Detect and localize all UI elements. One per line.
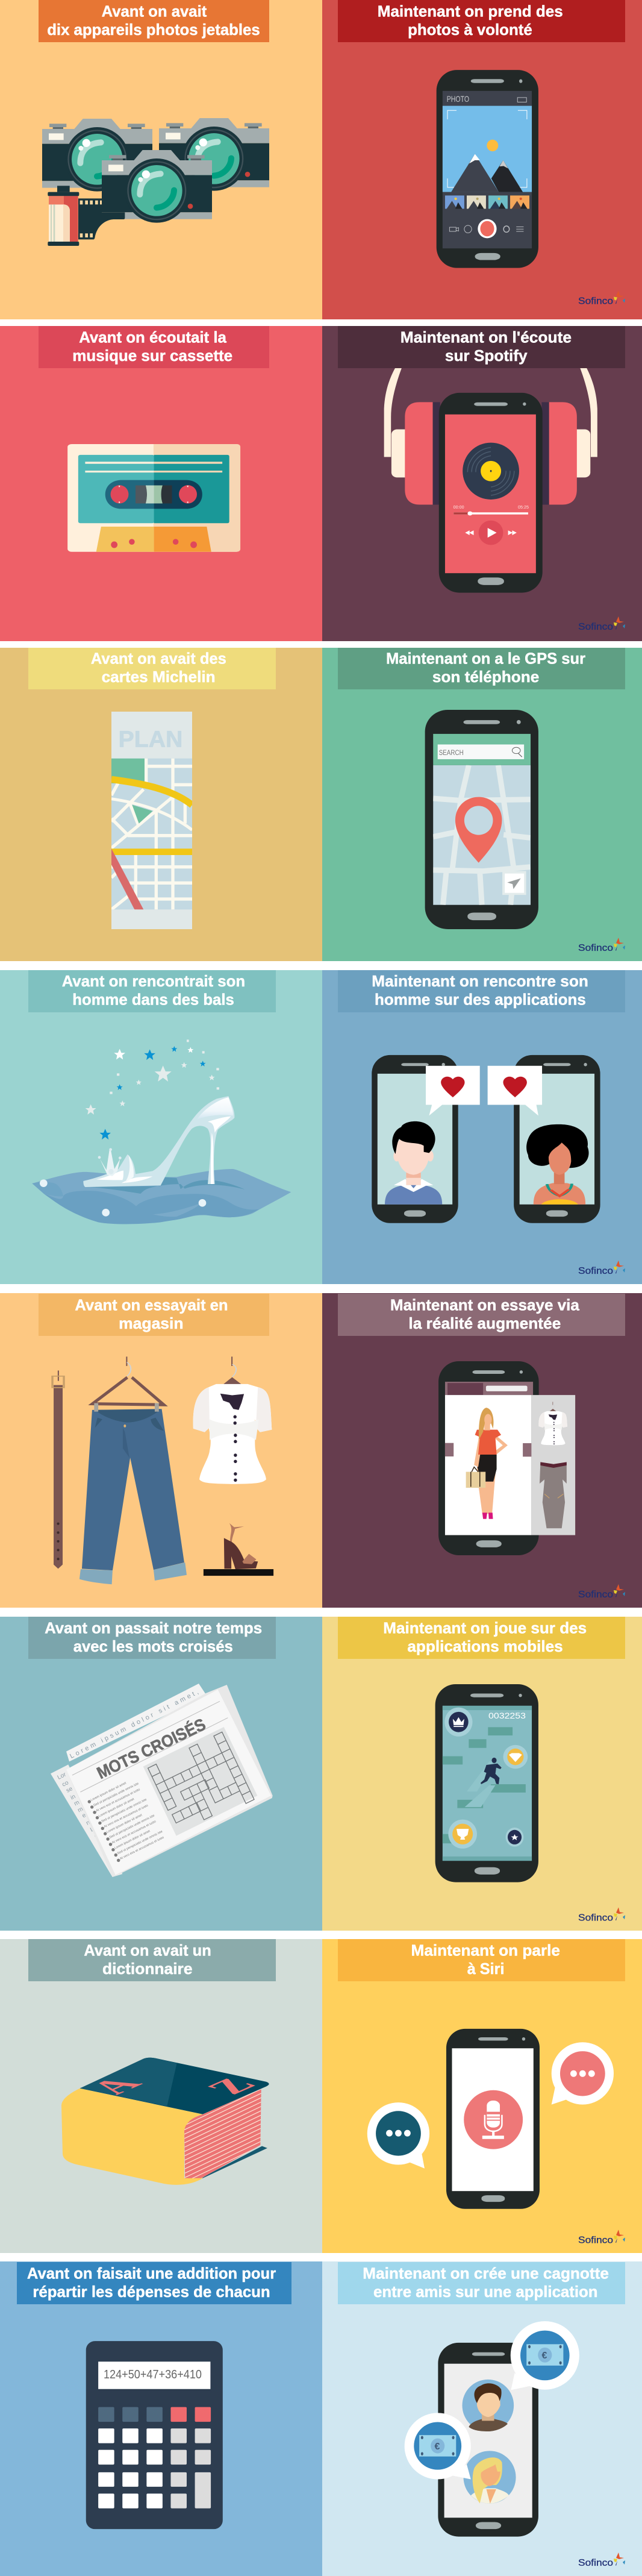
panel: GPS xyxy=(322,648,642,961)
speech bubble: euro left: € xyxy=(435,2442,440,2452)
logo: Sofinco xyxy=(578,1261,625,1276)
heading: Siri: à Siri xyxy=(467,1960,505,1978)
phone: camera app: PHOTO xyxy=(447,94,469,104)
logo: Sofinco xyxy=(578,1907,625,1923)
icon: newspaper: At vero eos et accusamus et iusto xyxy=(96,1788,141,1813)
phone: music player xyxy=(439,393,543,593)
phone: camera app xyxy=(437,70,538,268)
icon: glass slipper on cushion xyxy=(32,1039,291,1224)
logo: Sofinco: Sofinco xyxy=(578,2558,613,2568)
icon: newspaper: Sed ut perspiciatis unde omnis iste xyxy=(109,1814,155,1840)
heading: Spotify xyxy=(338,326,625,368)
speech bubble: blue xyxy=(367,2102,429,2169)
heading: GPS xyxy=(338,648,625,689)
icon: cameras and film roll xyxy=(42,118,269,246)
panel: money pot xyxy=(322,2261,642,2576)
logo: Sofinco: Sofinco xyxy=(578,1913,613,1923)
heading: ball xyxy=(28,970,276,1012)
panel: augmented reality xyxy=(322,1293,642,1608)
logo: Sofinco: Sofinco xyxy=(578,943,613,953)
row 6: crosswords vs. mobile games xyxy=(0,1617,642,1931)
logo: Sofinco xyxy=(578,290,625,306)
icon: two phones with hearts xyxy=(372,1055,600,1223)
row 2: cassette vs. Spotify xyxy=(0,326,642,641)
heading: shop xyxy=(39,1294,269,1336)
panel: calculator xyxy=(0,2261,322,2576)
cushion xyxy=(32,1169,291,1224)
heading: crosswords: avec les mots croisés xyxy=(73,1637,233,1655)
heading: phone photos: photos à volonté xyxy=(408,20,532,39)
logo: Sofinco: Sofinco xyxy=(578,1590,613,1600)
panel: mobile games xyxy=(322,1617,642,1931)
stars xyxy=(86,1039,219,1139)
logo: Sofinco xyxy=(578,616,625,632)
icon: newspaper: Lorem ipsum dolor sit amet xyxy=(114,1829,151,1850)
heading: Spotify: sur Spotify xyxy=(445,346,528,365)
icon: calculator xyxy=(86,2341,223,2529)
heading: augmented reality: Maintenant on essaye via xyxy=(390,1296,579,1314)
heading: cassette xyxy=(39,326,269,368)
icon: newspaper: Lorem ipsum dolor sit amet xyxy=(90,1781,127,1802)
speech bubble: pink xyxy=(552,2042,614,2105)
panel: Spotify xyxy=(322,326,642,641)
heading: crosswords xyxy=(28,1617,276,1659)
avatar: man xyxy=(462,2380,514,2431)
heading: dating apps xyxy=(338,970,625,1012)
panel: glass slipper xyxy=(0,970,322,1284)
heading: dating apps: homme sur des applications xyxy=(375,991,586,1009)
heading: calculator: Avant on faisait une addition pour xyxy=(27,2264,276,2283)
shirt xyxy=(193,1356,272,1484)
heading: Spotify: Maintenant on l'écoute xyxy=(400,328,572,346)
speech bubble: right heart xyxy=(488,1066,542,1115)
icon: newspaper: m xyxy=(73,1799,81,1807)
heading: augmented reality xyxy=(338,1294,625,1336)
heading: ball: Avant on rencontrait son xyxy=(62,972,245,990)
row 8: calculator vs. money pot xyxy=(0,2261,642,2576)
phone: game: 0032253 xyxy=(488,1711,526,1720)
row 7: dictionary vs. Siri xyxy=(0,1939,642,2253)
icon: newspaper: in xyxy=(69,1793,76,1801)
icon: newspaper: Lorem ipsum dolor sit amet xyxy=(98,1797,135,1818)
speech bubble: euro right: € xyxy=(542,2351,547,2361)
crown xyxy=(98,1148,122,1176)
heading: road map xyxy=(28,648,276,689)
shadow under shoe xyxy=(83,1177,245,1194)
icon: folded map: PLAN xyxy=(119,727,182,752)
panel: Siri xyxy=(322,1939,642,2253)
icon: newspaper: Sed ut perspiciatis unde omnis iste xyxy=(117,1830,163,1855)
icon: newspaper: Lorem ipsum dolor sit amet, xyxy=(69,1688,200,1760)
heading: calculator xyxy=(17,2262,291,2304)
heading: shop: magasin xyxy=(119,1314,184,1332)
icon: A-Z book: A xyxy=(79,2074,153,2098)
icon: newspaper: At vero eos et accusamus et iusto xyxy=(111,1820,157,1845)
heading: money pot: Maintenant on crée une cagnotte xyxy=(363,2264,609,2283)
icon: newspaper: MOTS CROISÉS xyxy=(94,1715,208,1782)
icon: newspaper: Lorem ipsum dolor sit amet xyxy=(106,1813,143,1834)
panel: road map xyxy=(0,648,322,961)
heading: dictionary: dictionnaire xyxy=(102,1960,193,1978)
heading: disposable cameras xyxy=(39,0,269,42)
panel: cassette xyxy=(0,326,322,641)
heading: phone photos: Maintenant on prend des xyxy=(378,2,563,20)
icon: cassette tape xyxy=(67,444,240,552)
logo: Sofinco: Sofinco xyxy=(578,296,613,306)
logo: Sofinco xyxy=(578,2230,625,2245)
heading: dictionary: Avant on avait un xyxy=(84,1941,211,1960)
icon: headphones xyxy=(384,368,597,505)
icon: newspaper: e xyxy=(81,1812,87,1819)
heading: calculator: répartir les dépenses de chacun xyxy=(33,2283,270,2301)
phone: money pot app xyxy=(438,2343,538,2537)
phone: voice assistant xyxy=(446,2029,540,2209)
heading: dating apps: Maintenant on rencontre son xyxy=(372,972,588,990)
heading: cassette: musique sur cassette xyxy=(72,346,232,365)
panel: phone photos xyxy=(322,0,642,319)
heading: GPS: Maintenant on a le GPS sur xyxy=(386,650,585,668)
panel: crosswords xyxy=(0,1617,322,1931)
icon: belt, jeans, shirt, shoe xyxy=(52,1356,273,1584)
icon: newspaper: At vero eos et accusamus et iusto xyxy=(104,1804,149,1829)
heading: shop: Avant on essayait en xyxy=(75,1296,228,1314)
woman figure xyxy=(466,1408,508,1519)
icon: newspaper: Lor xyxy=(57,1771,67,1781)
row 5: shop vs. augmented reality xyxy=(0,1293,642,1608)
icon: newspaper: c xyxy=(93,1832,99,1840)
icon: folded map xyxy=(111,712,192,929)
phone: virtual fitting xyxy=(438,1361,575,1555)
phone: music player: 00:00 xyxy=(453,506,464,510)
row 1: disposable cameras vs. phone photos xyxy=(0,0,642,319)
heading: crosswords: Avant on passait notre temps xyxy=(45,1619,262,1637)
slipper xyxy=(83,1096,234,1187)
panel: dating apps xyxy=(322,970,642,1284)
heading: disposable cameras: Avant on avait xyxy=(102,2,207,20)
heading: augmented reality: la réalité augmentée xyxy=(408,1314,561,1332)
logo: Sofinco xyxy=(578,2552,625,2568)
heading: Siri: Maintenant on parle xyxy=(411,1941,560,1960)
heading: mobile games: Maintenant on joue sur des xyxy=(383,1619,587,1637)
shoe on stand xyxy=(204,1523,273,1576)
avatar: woman xyxy=(464,2451,516,2504)
heading: GPS: son téléphone xyxy=(432,668,539,686)
heading: money pot xyxy=(338,2262,625,2304)
icon: newspaper: co xyxy=(61,1779,70,1788)
icon: calculator: 124+50+47+36+410 xyxy=(104,2368,202,2381)
heading: disposable cameras: dix appareils photos jetables xyxy=(47,20,260,39)
row 3: road map vs. GPS xyxy=(0,648,642,961)
belt xyxy=(52,1370,64,1568)
panel: shop clothes xyxy=(0,1293,322,1608)
logo: Sofinco: Sofinco xyxy=(578,622,613,632)
panel: disposable cameras xyxy=(0,0,322,319)
row 4: ball vs. dating apps xyxy=(0,970,642,1284)
cushion folds xyxy=(44,1191,259,1224)
logo: Sofinco xyxy=(578,938,625,953)
heading: dictionary xyxy=(28,1939,276,1981)
icon: newspaper: Sed ut perspiciatis unde omnis iste xyxy=(93,1782,139,1808)
phone: music player: 05:25 xyxy=(518,506,529,510)
icon: newspaper: L xyxy=(89,1826,95,1834)
phone: GPS map: SEARCH xyxy=(439,748,464,757)
logo: Sofinco: Sofinco xyxy=(578,1266,613,1276)
icon: newspaper: At vero eos et accusamus et iusto xyxy=(119,1836,164,1861)
mini shirt xyxy=(538,1402,567,1445)
icon: newspaper: m xyxy=(76,1806,84,1814)
panel: dictionary xyxy=(0,1939,322,2253)
icon: newspaper: n xyxy=(85,1819,91,1827)
phone: woman xyxy=(514,1055,600,1223)
heading: road map: Avant on avait des xyxy=(91,650,226,668)
heading: cassette: Avant on écoutait la xyxy=(79,328,226,346)
grey dress xyxy=(540,1462,567,1528)
speech bubble: euro right xyxy=(511,2321,579,2390)
icon: newspaper: se xyxy=(65,1785,74,1794)
heading: road map: cartes Michelin xyxy=(102,668,216,686)
icon: newspaper xyxy=(51,1684,273,1877)
phone: game xyxy=(435,1684,538,1882)
logo: Sofinco: Sofinco xyxy=(578,2235,613,2245)
pearls xyxy=(40,1179,206,1217)
icon: A-Z book: Z xyxy=(195,2075,267,2098)
heading: mobile games: applications mobiles xyxy=(407,1637,563,1655)
icon: newspaper: Sed ut perspiciatis unde omnis iste xyxy=(101,1798,148,1823)
heading: Siri xyxy=(338,1939,625,1981)
heading: mobile games xyxy=(338,1617,625,1659)
heading: ball: homme dans des bals xyxy=(72,991,234,1009)
heading: money pot: entre amis sur une application xyxy=(373,2283,597,2301)
icon: A-Z book xyxy=(61,2057,269,2185)
heading: phone photos xyxy=(338,0,625,42)
jeans on hanger xyxy=(79,1356,187,1584)
phone: man xyxy=(372,1055,458,1223)
phone: GPS map xyxy=(425,710,538,929)
speech bubble: euro left xyxy=(405,2413,471,2480)
speech bubble: left heart xyxy=(426,1066,480,1115)
logo: Sofinco xyxy=(578,1584,625,1600)
